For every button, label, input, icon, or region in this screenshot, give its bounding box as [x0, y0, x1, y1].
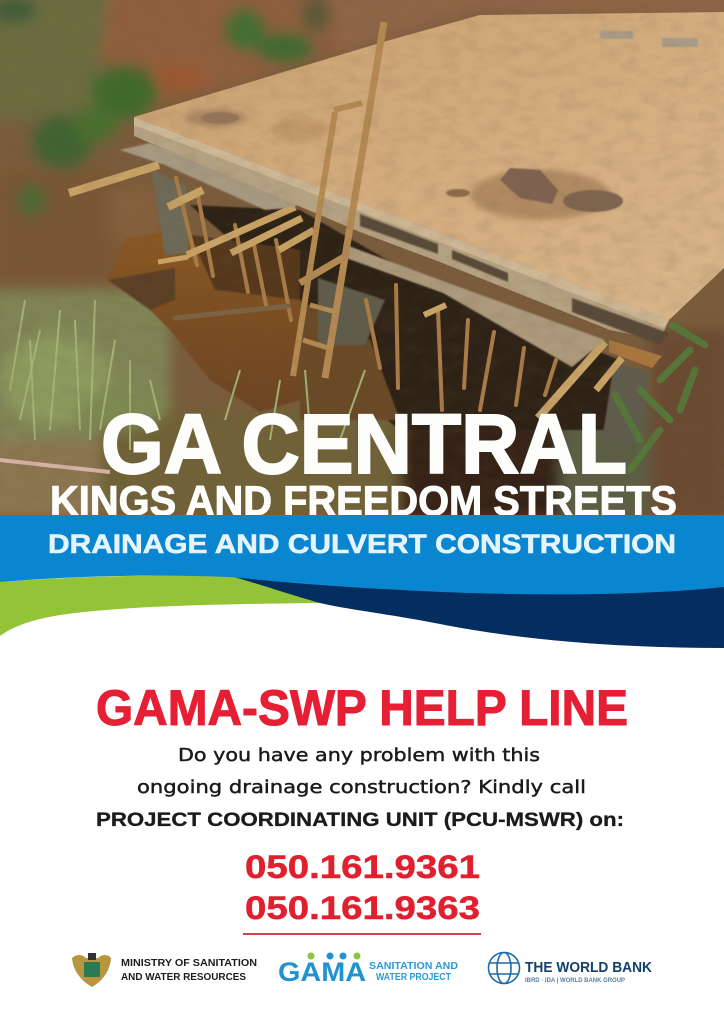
helpline body text: PROJECT COORDINATING UNIT (PCU-MSWR) on: [96, 809, 624, 831]
ministry label [121, 958, 257, 983]
green wave [0, 576, 322, 636]
helpline body text: Do you have any problem with this [178, 745, 540, 766]
slab top surface [134, 12, 724, 320]
rough concrete edge [120, 143, 605, 367]
timber beam [609, 340, 662, 368]
plants [615, 325, 705, 470]
GAMA project label [369, 961, 458, 983]
phone numbers [245, 849, 480, 926]
logo: GAMA: GAMA [278, 957, 366, 987]
wooden props [175, 178, 556, 410]
banner heading: DRAINAGE AND CULVERT CONSTRUCTION [48, 529, 676, 559]
grass [10, 300, 365, 450]
helpline body text [96, 745, 624, 831]
dark streaks on fascia [360, 214, 669, 345]
helpline heading: GAMA-SWP HELP LINE [96, 680, 628, 736]
logo: World Bank globe [488, 952, 520, 984]
slab stains [185, 109, 610, 220]
World Bank label: IBRD · IDA | WORLD BANK GROUP [525, 978, 625, 984]
GAMA project label: WATER PROJECT [376, 972, 451, 983]
World Bank label [525, 960, 652, 984]
concrete abutment [152, 170, 650, 440]
blue band [0, 515, 724, 594]
navy wave [230, 576, 724, 648]
photo grain [10, 13, 724, 470]
title: GA CENTRAL: GA CENTRAL [101, 397, 627, 491]
slab fascia [134, 117, 669, 340]
banner: wave shapes [0, 515, 724, 648]
phone numbers: 050.161.9363 [245, 890, 480, 926]
water channel [108, 205, 640, 430]
subtitle: Kings and Freedom Streets: KINGS AND FREEDOM STREETS [50, 477, 677, 524]
soil and vegetation background [0, 0, 724, 520]
ministry label: MINISTRY OF SANITATION [121, 958, 257, 969]
red rule [243, 933, 481, 935]
tape on ground [0, 460, 110, 472]
ladder [293, 22, 384, 378]
World Bank label: THE WORLD BANK [525, 960, 652, 976]
helpline body text: ongoing drainage construction? Kindly call [137, 777, 586, 798]
GAMA project label: SANITATION AND [369, 961, 458, 972]
ministry label: AND WATER RESOURCES [121, 972, 246, 983]
phone numbers: 050.161.9361 [245, 849, 480, 885]
photo: culvert slab under construction [0, 0, 724, 520]
logo: Ghana coat of arms [72, 953, 111, 987]
